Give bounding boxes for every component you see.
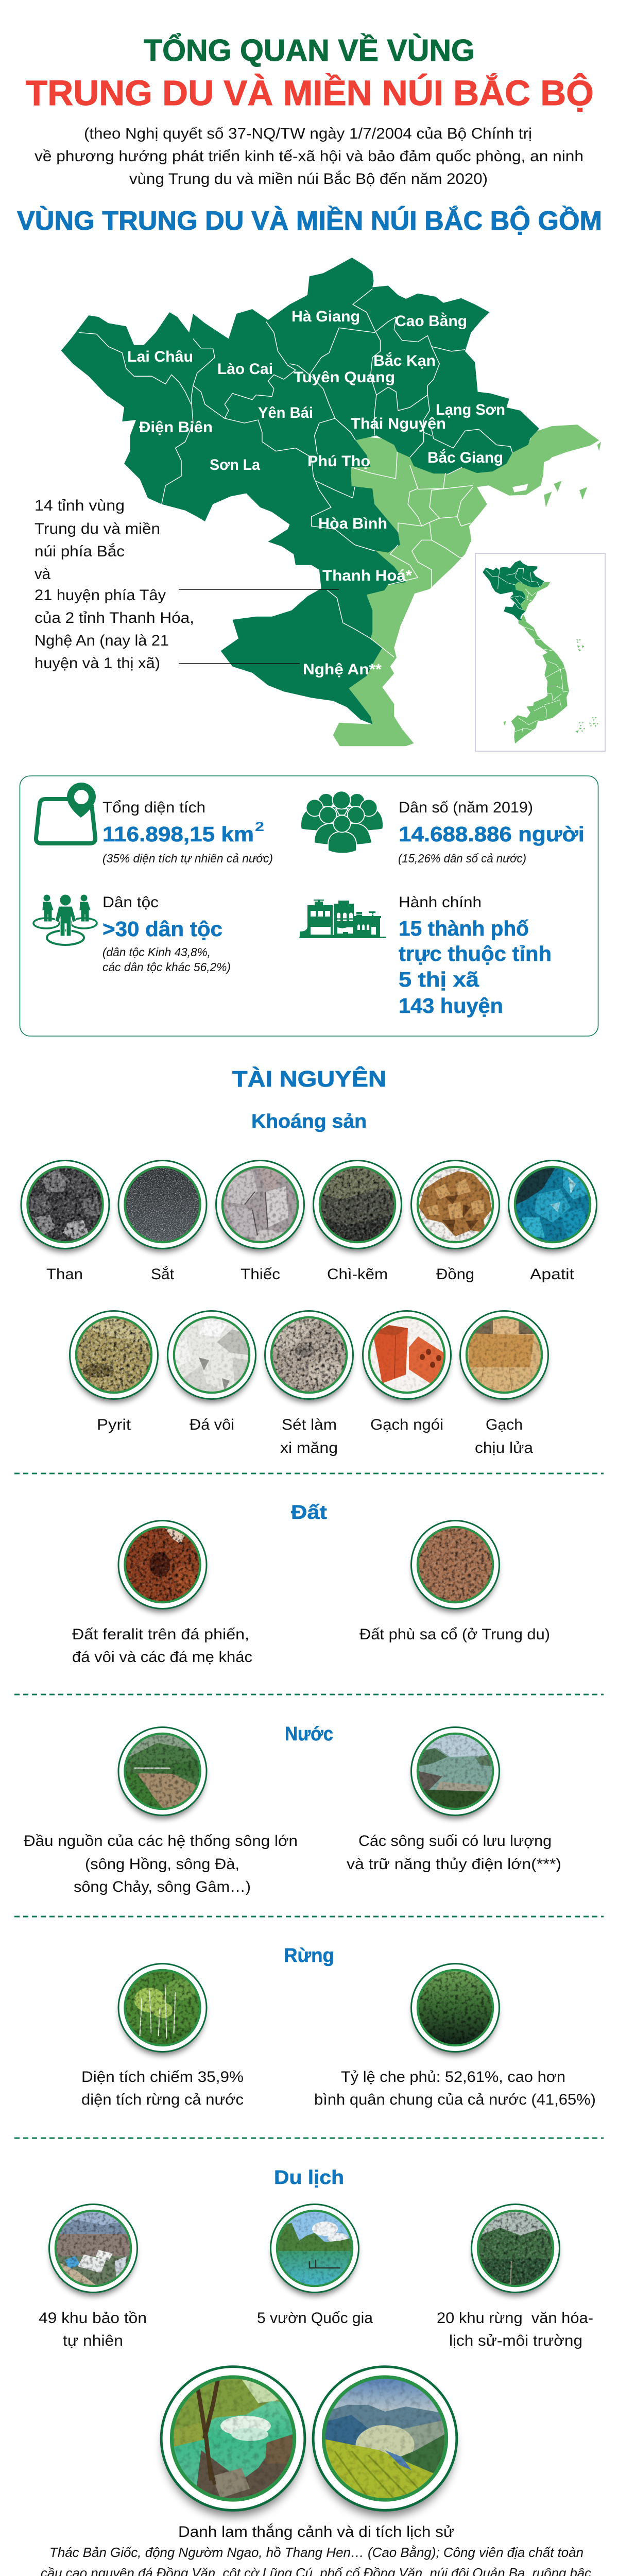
mineral: pyrite bbox=[70, 1311, 158, 1433]
province labels: Lạng Sơn bbox=[436, 401, 505, 418]
stat: administration: 15 thành phố bbox=[399, 917, 529, 940]
stat: area: 2 bbox=[255, 820, 264, 834]
stat: administration: Hành chính bbox=[399, 894, 482, 911]
mineral: tin: Thiếc bbox=[241, 1266, 280, 1283]
mineral: copper: Đồng bbox=[436, 1266, 474, 1283]
stat: population: Dân số (năm 2019) bbox=[399, 799, 533, 816]
subtitle bbox=[35, 125, 583, 188]
stat: ethnic groups: các dân tộc khác 56,2%) bbox=[102, 960, 231, 974]
heading: minerals: Khoáng sản bbox=[251, 1111, 367, 1132]
mineral: refractory bricks: Gạch bbox=[486, 1416, 523, 1433]
stat: area: Tổng diện tích bbox=[102, 799, 205, 816]
stat: administration bbox=[399, 894, 552, 1018]
province labels: Thái Nguyên bbox=[351, 415, 446, 432]
mineral: iron bbox=[118, 1160, 207, 1283]
soil: feralit: Đất feralit trên đá phiến, bbox=[72, 1626, 249, 1643]
stat: ethnic groups: (dân tộc Kinh 43,8%, bbox=[102, 945, 211, 959]
subtitle: vùng Trung du và miền núi Bắc Bộ đến năm 2020) bbox=[129, 171, 488, 188]
province labels: Điện Biên bbox=[139, 419, 213, 436]
soil: alluvial: Đất phù sa cổ (ở Trung du) bbox=[359, 1626, 550, 1643]
soil: feralit bbox=[72, 1521, 252, 1666]
map note: Trung du và miền bbox=[35, 520, 160, 537]
tourism: landmarks text: Thác Bản Giốc, động Ngườm Ngao, hồ Thang Hen… (Cao Bằng); Công viên địa chất toàn bbox=[49, 2545, 583, 2560]
heading: water: Nước bbox=[285, 1723, 333, 1745]
stat: area: (35% diện tích tự nhiên cả nước) bbox=[102, 852, 273, 865]
map note: 21 huyện phía Tây bbox=[35, 587, 166, 604]
mineral: tin bbox=[216, 1160, 304, 1283]
map shapes bbox=[61, 258, 601, 746]
map note: và bbox=[35, 566, 50, 583]
province labels: Bắc Giang bbox=[427, 449, 503, 466]
mineral: cement clay: Sét làm bbox=[282, 1416, 337, 1433]
subtitle: về phương hướng phát triển kinh tế-xã hội và bảo đảm quốc phòng, an ninh bbox=[35, 148, 583, 165]
subtitle: (theo Nghị quyết số 37-NQ/TW ngày 1/7/2004 của Bộ Chính trị bbox=[84, 125, 532, 142]
forest: coverage: bình quân chung của cả nước (41,65%) bbox=[314, 2091, 596, 2108]
forest: area: diện tích rừng cả nước bbox=[81, 2091, 244, 2108]
tourism: cultural forests bbox=[437, 2204, 593, 2349]
heading: forest: Rừng bbox=[284, 1945, 334, 1967]
province labels: Nghệ An** bbox=[303, 661, 382, 678]
heading: tourism: Du lịch bbox=[274, 2167, 344, 2189]
forest: area bbox=[81, 1964, 244, 2108]
tourism: nature reserves bbox=[39, 2204, 147, 2349]
mineral: pyrite: Pyrit bbox=[97, 1416, 131, 1433]
mineral: cement clay: xi măng bbox=[280, 1439, 338, 1456]
mineral: limestone bbox=[168, 1311, 255, 1433]
water: hydropower rivers: và trữ năng thủy điện lớn(***) bbox=[347, 1856, 561, 1873]
province labels: Yên Bái bbox=[258, 404, 313, 421]
stat: ethnic groups: >30 dân tộc bbox=[102, 917, 222, 941]
stat: population bbox=[398, 799, 585, 865]
province labels bbox=[127, 308, 505, 678]
tourism: landmarks text bbox=[40, 2523, 593, 2576]
map note bbox=[35, 497, 194, 672]
forest: coverage: Tỷ lệ che phủ: 52,61%, cao hơn bbox=[341, 2069, 565, 2086]
stat: population: 14.688.886 người bbox=[399, 822, 585, 846]
tourism: landscape photo right bbox=[313, 2367, 457, 2516]
mineral: refractory bricks: chịu lửa bbox=[475, 1439, 533, 1456]
province labels: Cao Bằng bbox=[395, 312, 467, 330]
icon: three people on discs bbox=[33, 894, 97, 945]
province labels: Hòa Bình bbox=[318, 515, 387, 532]
stat: administration: 5 thị xã bbox=[399, 968, 479, 991]
province labels: Sơn La bbox=[210, 456, 260, 473]
lowland province borders bbox=[352, 452, 473, 588]
stat: ethnic groups: Dân tộc bbox=[102, 894, 159, 911]
lowland provinces bbox=[315, 425, 599, 746]
water: headwaters bbox=[24, 1727, 298, 1895]
province labels: Thanh Hoá* bbox=[322, 567, 412, 584]
leader line: Nghệ An bbox=[179, 663, 300, 664]
stat: area: 116.898,15 km bbox=[102, 822, 254, 846]
heading: resources: TÀI NGUYÊN bbox=[232, 1066, 386, 1092]
stat: area bbox=[102, 799, 273, 865]
regional map bbox=[35, 258, 605, 751]
province labels: Lai Châu bbox=[127, 348, 193, 365]
tourism: nature reserves: tự nhiên bbox=[63, 2332, 123, 2349]
province borders bbox=[79, 289, 512, 657]
leader line: Thanh Hoá bbox=[179, 589, 339, 590]
mineral: iron: Sắt bbox=[151, 1266, 175, 1283]
water: hydropower rivers bbox=[347, 1727, 561, 1873]
soil: feralit: đá vôi và các đá mẹ khác bbox=[72, 1649, 252, 1666]
title line 2: TRUNG DU VÀ MIỀN NÚI BẮC BỘ bbox=[26, 73, 594, 113]
tourism: national parks bbox=[257, 2204, 373, 2327]
title line 1: TỔNG QUAN VỀ VÙNG bbox=[144, 33, 475, 67]
tourism: national parks: 5 vườn Quốc gia bbox=[257, 2310, 373, 2327]
mineral: coal: Than bbox=[46, 1266, 83, 1283]
heading: region includes: VÙNG TRUNG DU VÀ MIỀN NÚI BẮC BỘ GỒM bbox=[17, 206, 602, 236]
province labels: Hà Giang bbox=[291, 308, 360, 325]
stat: administration: 143 huyện bbox=[399, 994, 503, 1018]
icon: crowd bbox=[301, 791, 383, 853]
water: headwaters: (sông Hồng, sông Đà, bbox=[85, 1856, 239, 1873]
panel: key statistics bbox=[20, 776, 598, 1036]
mineral: refractory bricks bbox=[460, 1311, 548, 1456]
map note: Nghệ An (nay là 21 bbox=[35, 632, 169, 649]
mineral: apatite bbox=[509, 1160, 596, 1283]
tourism: landmarks text: Danh lam thắng cảnh và di tích lịch sử bbox=[178, 2523, 454, 2540]
tourism: cultural forests: 20 khu rừng văn hóa- bbox=[437, 2310, 593, 2327]
icon: buildings bbox=[299, 900, 388, 938]
mineral: limestone: Đá vôi bbox=[190, 1416, 234, 1433]
mineral: apatite: Apatit bbox=[530, 1266, 575, 1283]
mineral: coal bbox=[21, 1160, 109, 1283]
water: headwaters: Đầu nguồn của các hệ thống sông lớn bbox=[24, 1833, 298, 1850]
map note: của 2 tỉnh Thanh Hóa, bbox=[35, 609, 194, 626]
heading: soil: Đất bbox=[291, 1502, 327, 1523]
tourism: landscape photo left bbox=[161, 2367, 305, 2516]
map note: 14 tỉnh vùng bbox=[35, 497, 125, 514]
mineral: lead-zinc: Chì-kẽm bbox=[327, 1266, 388, 1283]
tourism: nature reserves: 49 khu bảo tồn bbox=[39, 2310, 147, 2327]
soil: alluvial bbox=[359, 1521, 550, 1643]
map note: huyện và 1 thị xã) bbox=[35, 655, 160, 672]
province labels: Lào Cai bbox=[217, 361, 273, 378]
tourism: cultural forests: lịch sử-môi trường bbox=[449, 2332, 582, 2349]
water: hydropower rivers: Các sông suối có lưu lượng bbox=[358, 1833, 552, 1850]
water: headwaters: sông Chảy, sông Gâm…) bbox=[74, 1878, 251, 1895]
mineral: copper bbox=[411, 1160, 500, 1283]
forest: area: Diện tích chiếm 35,9% bbox=[81, 2069, 244, 2086]
stat: ethnic groups bbox=[102, 894, 231, 974]
mineral: cement clay bbox=[265, 1311, 353, 1456]
map note: núi phía Bắc bbox=[35, 543, 125, 560]
mineral: lead-zinc bbox=[313, 1160, 402, 1283]
province labels: Phú Thọ bbox=[307, 453, 370, 470]
mineral: bricks and tiles bbox=[363, 1311, 451, 1433]
islands bbox=[481, 457, 579, 500]
northern midland and mountain provinces bbox=[61, 258, 539, 724]
stat: population: (15,26% dân số cả nước) bbox=[398, 852, 526, 865]
province labels: Tuyên Quang bbox=[294, 369, 395, 386]
inset map of Vietnam bbox=[475, 553, 605, 751]
forest: coverage bbox=[314, 1964, 596, 2108]
province labels: Bắc Kạn bbox=[373, 352, 436, 369]
stat: administration: trực thuộc tỉnh bbox=[399, 942, 552, 965]
icon: map with pin bbox=[36, 783, 96, 843]
mineral: bricks and tiles: Gạch ngói bbox=[370, 1416, 443, 1433]
